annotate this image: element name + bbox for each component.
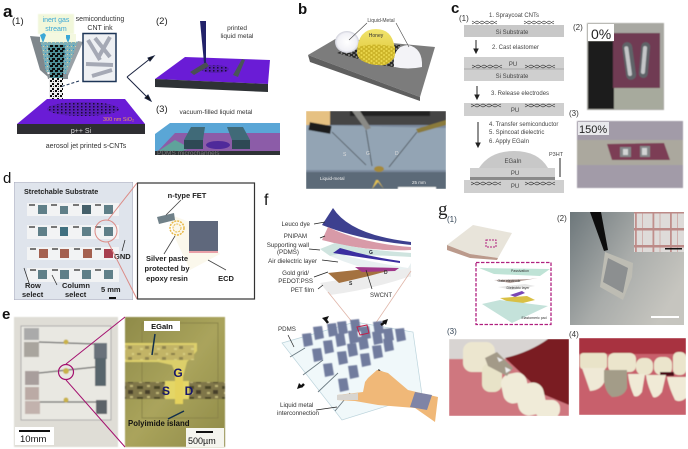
step 1: spraycoat CNTs: 1. Spraycoat CNTs xyxy=(489,13,539,19)
heading: b: b xyxy=(298,1,307,18)
arrow: step 1 to 2 xyxy=(474,40,478,53)
photo: probes on device xyxy=(306,111,446,189)
label: semiconducting CNT ink xyxy=(76,16,124,32)
heading: g: g xyxy=(438,199,448,220)
label: PDMS microchannels: PDMS microchannels xyxy=(157,150,220,157)
substrate with deposited CNT xyxy=(17,99,145,134)
zoom lines xyxy=(328,271,411,333)
photo: 150% strain: 150% xyxy=(579,124,607,136)
layer labels: Supporting wall xyxy=(267,242,309,249)
inset: CNT ink box xyxy=(60,34,116,87)
layer labels xyxy=(267,221,392,299)
step 1: spraycoat CNTs xyxy=(464,13,564,37)
layer labels: G xyxy=(369,250,373,256)
label: Liquid-Metal with pointers: Liquid-Metal xyxy=(367,18,395,24)
label: semiconducting CNT ink: CNT ink xyxy=(87,25,113,32)
layer labels: PET film xyxy=(291,287,314,294)
layer labels: (PDMS) xyxy=(277,249,299,256)
photo: device on molar xyxy=(449,339,569,418)
final device stack: PU xyxy=(511,184,519,190)
photo: probes on device: D xyxy=(395,151,399,157)
callout: circle and zoom lines xyxy=(95,183,137,299)
photo: micrograph of transistor: D xyxy=(185,384,194,398)
exploded stack inset: Passivation xyxy=(511,269,529,273)
photo: micrograph of transistor: Polyimide island xyxy=(128,419,190,428)
step 3: release electrodes: 3. Release electrodes xyxy=(491,91,549,97)
photo: micrograph of transistor: G xyxy=(173,366,183,380)
label: g step 2: (2) xyxy=(557,214,567,223)
label: step 3: (3) xyxy=(156,104,168,115)
label: row and column select xyxy=(22,268,90,299)
label: step 1: (1) xyxy=(12,16,24,27)
label: 5 mm scale: 5 mm xyxy=(101,285,121,294)
photo: probes on device: 25 mm xyxy=(412,180,426,185)
layer labels: PEDOT:PSS xyxy=(278,278,313,285)
label: GND xyxy=(114,240,131,261)
heading: f: f xyxy=(264,192,269,209)
label: inert gas stream: stream xyxy=(45,26,67,33)
3D schematic substrate xyxy=(308,29,435,101)
label: Liquid metal interconnection: Liquid metal xyxy=(280,402,313,409)
exploded stack inset xyxy=(476,240,551,324)
layer labels: Air dielectric layer xyxy=(268,258,317,265)
label: row and column select: select xyxy=(22,290,44,299)
label: step 2: (2) xyxy=(156,16,168,27)
label: PDMS: PDMS xyxy=(278,326,296,333)
label: inert gas stream: inert gas xyxy=(43,17,70,24)
steps 4 to 6 text: 5. Spincoat dielectric xyxy=(489,130,544,136)
stretchable PDMS sheet with cells xyxy=(282,319,422,420)
caption: aerosol jet printed s-CNTs: aerosol jet printed s-CNTs xyxy=(46,143,127,150)
inset: n-type FET closeup: epoxy resin xyxy=(146,274,188,283)
photo: 0% strain: 0% xyxy=(591,26,611,42)
label: 300 nm SiO2: 300 nm SiO₂ xyxy=(103,117,134,123)
step 2: cast elastomer: 2. Cast elastomer xyxy=(492,45,539,51)
label: c step 2: (2) xyxy=(573,23,583,32)
inset: n-type FET closeup: protected by xyxy=(144,264,190,273)
exploded stack inset: Elastomeric pad xyxy=(521,316,547,320)
label: Stretchable Substrate: Stretchable Substrate xyxy=(24,187,98,196)
photo: device on substrate: 10mm xyxy=(20,434,46,445)
photo: micrograph of transistor: S xyxy=(162,384,170,398)
exploded layer stack xyxy=(320,208,411,295)
photo: device on incisor xyxy=(579,338,686,415)
photo: micrograph of transistor: 500µm xyxy=(188,436,216,446)
photo: probes on device: S xyxy=(343,152,347,158)
label: row and column select: Row xyxy=(25,281,41,290)
heading: d: d xyxy=(3,170,11,187)
arrow: to step 2 xyxy=(127,56,154,77)
layer labels: Gold grid/ xyxy=(282,270,309,277)
panel: d FET array on stretchable substrate xyxy=(3,170,254,300)
heading: c: c xyxy=(451,0,459,17)
label: Liquid-Metal with pointers xyxy=(349,18,409,47)
exploded stack inset: Dielectric layer xyxy=(507,286,530,290)
step 2: cast elastomer xyxy=(464,45,564,81)
steps 4 to 6 text: 6. Apply EGaIn xyxy=(489,139,529,145)
label: Liquid metal interconnection: interconnection xyxy=(277,410,320,417)
layer labels: Leuco dye xyxy=(281,221,311,228)
label: 5 mm scale xyxy=(101,285,121,299)
photo: 150% strain xyxy=(577,121,683,188)
photo: micrograph of transistor xyxy=(125,317,225,447)
layer labels: SWCNT xyxy=(370,293,392,299)
icon: hand with sensor patch xyxy=(337,370,438,422)
layer labels: D xyxy=(384,270,388,276)
label: row and column select: Column xyxy=(62,281,90,290)
layer labels: PNIPAM xyxy=(284,233,307,240)
panel: f skin-mounted active matrix xyxy=(264,192,438,422)
panel: e transistor photo and micrograph xyxy=(2,306,225,447)
steps 4 to 6 text: 4. Transfer semiconductor xyxy=(489,122,558,128)
label: p++ Si: p++ Si xyxy=(71,128,92,135)
label: GND: GND xyxy=(114,252,131,261)
panel: g tooth-mounted device xyxy=(438,199,686,418)
vacuum-filled microchannel device xyxy=(155,123,280,155)
final device stack: EGaIn xyxy=(504,159,522,165)
panel: a aerosol jet printed CNT transistor xyxy=(3,2,280,157)
label: printed liquid metal: printed xyxy=(227,25,247,32)
step 2: cast elastomer: PU xyxy=(509,62,517,68)
panel: b honey gated device xyxy=(298,1,446,189)
arrow: step 3 to final xyxy=(476,122,480,147)
icon: nozzle with spray xyxy=(30,33,83,102)
label: Honey: Honey xyxy=(369,33,384,39)
photo: stretchable substrate array xyxy=(14,182,133,300)
callout: circle and zoom lines xyxy=(58,317,125,447)
inset: n-type FET closeup xyxy=(138,183,254,299)
photo: probes on device: G xyxy=(366,151,370,157)
step 1: spraycoat CNTs: Si Substrate xyxy=(496,30,529,36)
label: c step 3: (3) xyxy=(569,109,579,118)
panel: c fabrication process xyxy=(451,0,683,193)
label: PDMS xyxy=(278,326,296,347)
final device stack: PU xyxy=(511,171,519,177)
arrow: step 2 to 3 xyxy=(475,86,479,99)
label: printed liquid metal: liquid metal xyxy=(221,33,254,40)
label: semiconducting CNT ink: semiconducting xyxy=(76,16,124,23)
inset: n-type FET closeup: n-type FET xyxy=(168,191,207,200)
label: g step 3: (3) xyxy=(447,327,457,336)
step 3: release electrodes xyxy=(464,91,564,116)
layer labels: S xyxy=(349,281,353,287)
icon: flexible fabric sheet xyxy=(447,225,512,260)
step 2: cast elastomer: Si Substrate xyxy=(496,74,529,80)
label: vacuum-filled liquid metal: vacuum-filled liquid metal xyxy=(180,109,253,116)
label: EGaIn: EGaIn xyxy=(151,322,173,331)
photo: film held by tweezers xyxy=(570,212,684,325)
final device stack: P3HT xyxy=(549,152,564,158)
arrow: to step 3 xyxy=(127,77,151,101)
steps 4 to 6 text xyxy=(489,122,558,145)
final device stack xyxy=(464,151,564,193)
printed liquid metal device xyxy=(155,21,270,92)
label: printed liquid metal xyxy=(221,25,254,40)
label: Liquid metal interconnection xyxy=(277,402,337,417)
label: g step 1: (1) xyxy=(447,215,457,224)
inset: n-type FET closeup: Silver paste xyxy=(146,254,188,263)
step 3: release electrodes: PU xyxy=(511,108,519,114)
label: inert gas stream xyxy=(38,14,74,34)
label: row and column select: select xyxy=(65,290,87,299)
heading: e: e xyxy=(2,306,10,323)
photo: device on substrate xyxy=(14,317,118,447)
inset: n-type FET closeup: ECD xyxy=(218,274,234,283)
icon: stretch arrows xyxy=(297,316,388,389)
photo: 0% strain xyxy=(587,23,664,110)
label: c step 1: (1) xyxy=(459,14,469,23)
photo: probes on device: Liquid-metal xyxy=(320,176,345,181)
label: g step 4: (4) xyxy=(569,330,579,339)
exploded stack inset: Gate electrode xyxy=(498,279,521,283)
heading: a: a xyxy=(3,2,13,21)
